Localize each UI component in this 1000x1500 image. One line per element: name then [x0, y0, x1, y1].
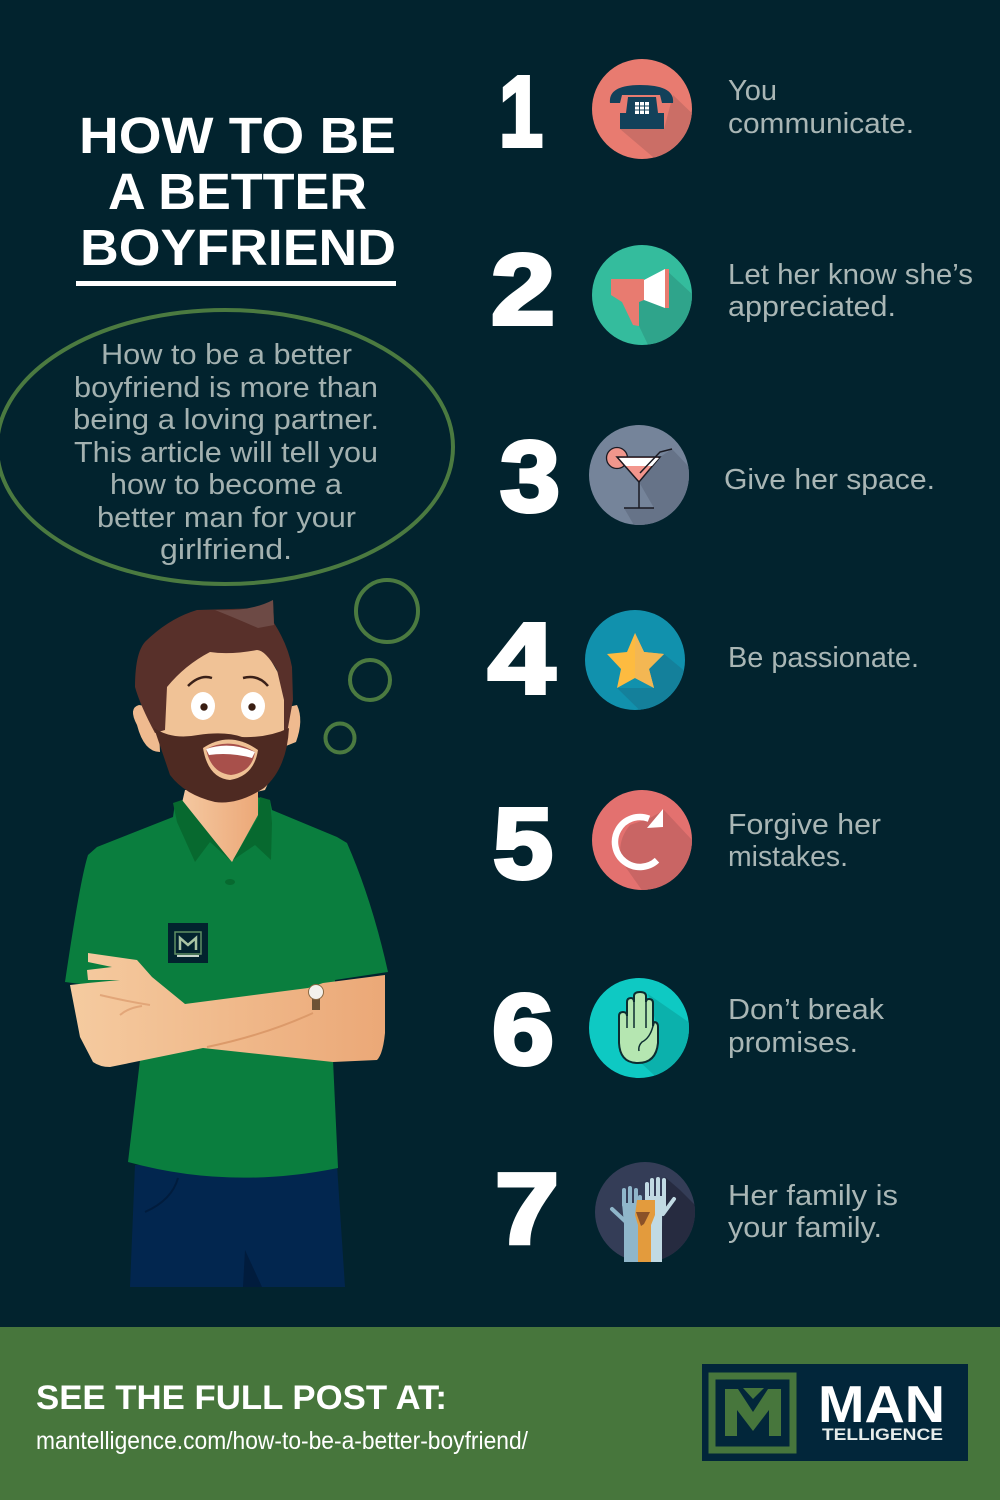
step 2: appreciation: [492, 245, 972, 345]
title: BOYFRIEND: [80, 219, 396, 276]
step 1: communicate: [502, 59, 912, 159]
step 7: family: [498, 1162, 897, 1262]
thought bubble with intro text: This article will tell you: [74, 437, 378, 469]
icon: raised hands: [595, 1162, 695, 1262]
text: Let her know she’s: [728, 259, 973, 291]
step 6: promises: [494, 978, 884, 1078]
step 6: promises: 6: [492, 974, 554, 1086]
text: appreciated.: [728, 291, 896, 323]
step 1: communicate: 1: [499, 56, 543, 168]
thought bubble trail circles: [326, 580, 418, 752]
step 5: forgiveness: 5: [493, 788, 553, 900]
thought bubble with intro text: boyfriend is more than: [74, 372, 378, 404]
text: Give her space.: [724, 464, 935, 496]
text: You: [728, 75, 777, 107]
logo: Mantelligence: [702, 1364, 968, 1461]
title: [76, 107, 396, 286]
wrist watch: [308, 984, 324, 1010]
text: [728, 75, 914, 140]
text: Forgive her: [728, 809, 881, 841]
icon: megaphone: [592, 245, 692, 345]
text: [728, 259, 973, 323]
text: promises.: [728, 1027, 858, 1059]
footer band: [0, 1327, 1000, 1500]
step 3: space: [500, 425, 932, 525]
footer call to action: SEE THE FULL POST AT:: [36, 1379, 447, 1417]
thought bubble with intro text: being a loving partner.: [73, 404, 379, 436]
icon: raised hand: [589, 978, 689, 1078]
text: Her family is: [728, 1180, 898, 1212]
icon: cocktail glass: [589, 425, 689, 525]
title: HOW TO BE: [79, 107, 396, 164]
text: [728, 809, 881, 873]
footer url: mantelligence.com/how-to-be-a-better-boyfriend/: [36, 1427, 528, 1455]
text: Be passionate.: [728, 642, 919, 674]
step 5: forgiveness: [494, 790, 880, 890]
step 4: passion: [487, 610, 916, 710]
icon: star: [585, 610, 685, 710]
logo: Mantelligence: MAN: [818, 1376, 945, 1434]
icon: circular arrow: [592, 790, 692, 890]
step 2: appreciation: 2: [491, 234, 555, 346]
step 7: family: 7: [495, 1153, 559, 1265]
text: your family.: [728, 1212, 882, 1244]
text: mistakes.: [728, 841, 848, 873]
text: Don’t break: [728, 994, 885, 1026]
step 3: space: 3: [500, 421, 560, 533]
text: [728, 994, 885, 1059]
thought bubble with intro text: How to be a better: [101, 339, 352, 371]
title: A BETTER: [108, 163, 367, 220]
thought bubble with intro text: better man for your: [97, 502, 356, 534]
thought bubble with intro text: [0, 310, 453, 584]
illustration: smiling bearded man with crossed arms: [65, 600, 388, 1287]
logo: Mantelligence: TELLIGENCE: [822, 1426, 943, 1444]
head: [133, 600, 300, 802]
text: [728, 1180, 898, 1244]
icon: telephone: [592, 59, 692, 159]
text: communicate.: [728, 108, 914, 140]
shirt badge: [168, 923, 208, 963]
thought bubble with intro text: girlfriend.: [160, 534, 292, 566]
thought bubble with intro text: how to become a: [110, 469, 343, 501]
step 4: passion: 4: [488, 603, 555, 715]
